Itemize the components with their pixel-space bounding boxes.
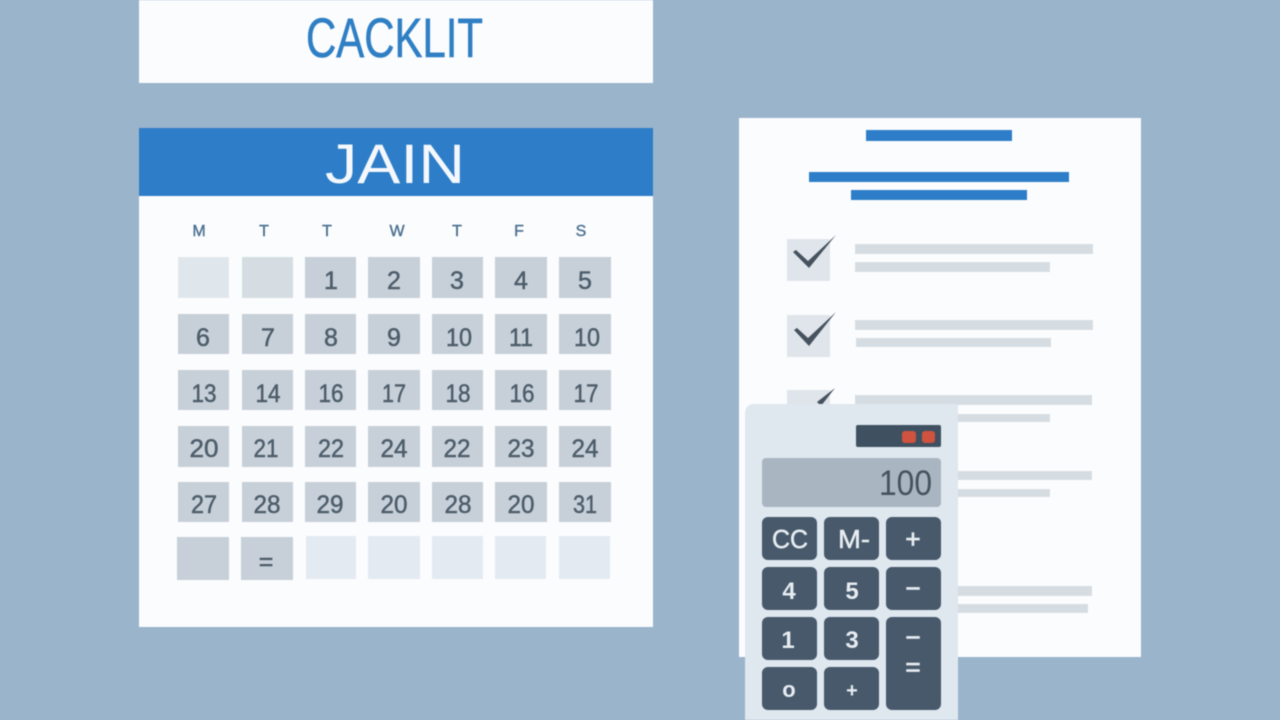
date cells: 14 [256,380,281,408]
calendar header band: JAIN [325,132,465,195]
checklist item 1 [787,235,1093,281]
date cells: 10 [574,324,600,352]
date cells: 20 [380,491,408,519]
date cells: 1 [324,267,338,295]
panel: checklist document [739,118,1141,657]
date cells: 4 [514,267,528,295]
date cells: 10 [446,324,472,352]
checklist item 5 lines [900,586,1092,613]
checklist item 3 [787,388,1092,422]
date cells: 28 [444,491,472,519]
date cells: 20 [508,491,534,519]
calculator keypad: 3 [845,627,859,654]
weekday labels: S [576,223,586,240]
date cells: 31 [573,491,597,519]
calculator solar strip [856,425,941,447]
calculator keypad: + [846,680,858,702]
weekday labels [192,223,586,240]
date cells: 9 [387,324,401,352]
calculator keypad: M- [838,524,870,554]
checklist item 4 lines [900,471,1092,497]
date cells: 23 [508,435,534,463]
calculator display: 100 [879,464,932,503]
title: CACKLIT [306,6,483,69]
calculator keypad: 1 [781,627,795,654]
date cells: 13 [192,380,216,408]
calculator keypad: o [782,677,796,702]
weekday labels: T [452,223,462,240]
date cells: 17 [574,380,598,408]
weekday labels: T [322,223,332,240]
date cells: 18 [446,380,470,408]
date cells: 24 [572,435,599,463]
date cells: 17 [382,380,406,408]
date cells: 22 [444,435,470,463]
calendar header band [139,128,653,196]
weekday labels: W [389,223,405,240]
date cells: 24 [380,435,408,463]
date cells: 22 [318,435,344,463]
weekday labels: T [259,223,269,240]
calculator keypad: − [905,573,921,603]
date cells: 8 [324,324,338,352]
panel: title card [139,0,653,83]
date cells: 3 [450,267,464,295]
date cells: 16 [510,380,534,408]
date cells: 2 [387,267,401,295]
calculator [745,404,958,720]
calculator display [762,458,941,507]
document heading bars [809,130,1069,200]
date cells: 27 [191,491,217,519]
date cells: 21 [254,435,278,463]
checklist item 2 [787,312,1093,357]
weekday labels: M [192,223,206,240]
date cells: = [259,548,273,576]
date cells [177,257,611,580]
calculator keypad: 5 [845,578,859,605]
date cells: 28 [254,491,280,519]
date cells: 5 [578,267,592,295]
panel: calendar [139,128,653,627]
date cells: 6 [196,324,210,352]
date cells: 11 [509,324,533,352]
calculator keypad: + [905,524,921,554]
calculator keypad: − [905,622,921,652]
date cells: 20 [190,435,218,463]
weekday labels: F [514,223,524,240]
calculator keypad: = [905,652,921,682]
calculator keypad [762,517,941,710]
calculator keypad: 4 [782,578,796,605]
calculator keypad: CC [772,524,808,554]
date cells: 7 [261,324,275,352]
date cells: 29 [316,491,344,519]
date cells: 16 [318,380,344,408]
